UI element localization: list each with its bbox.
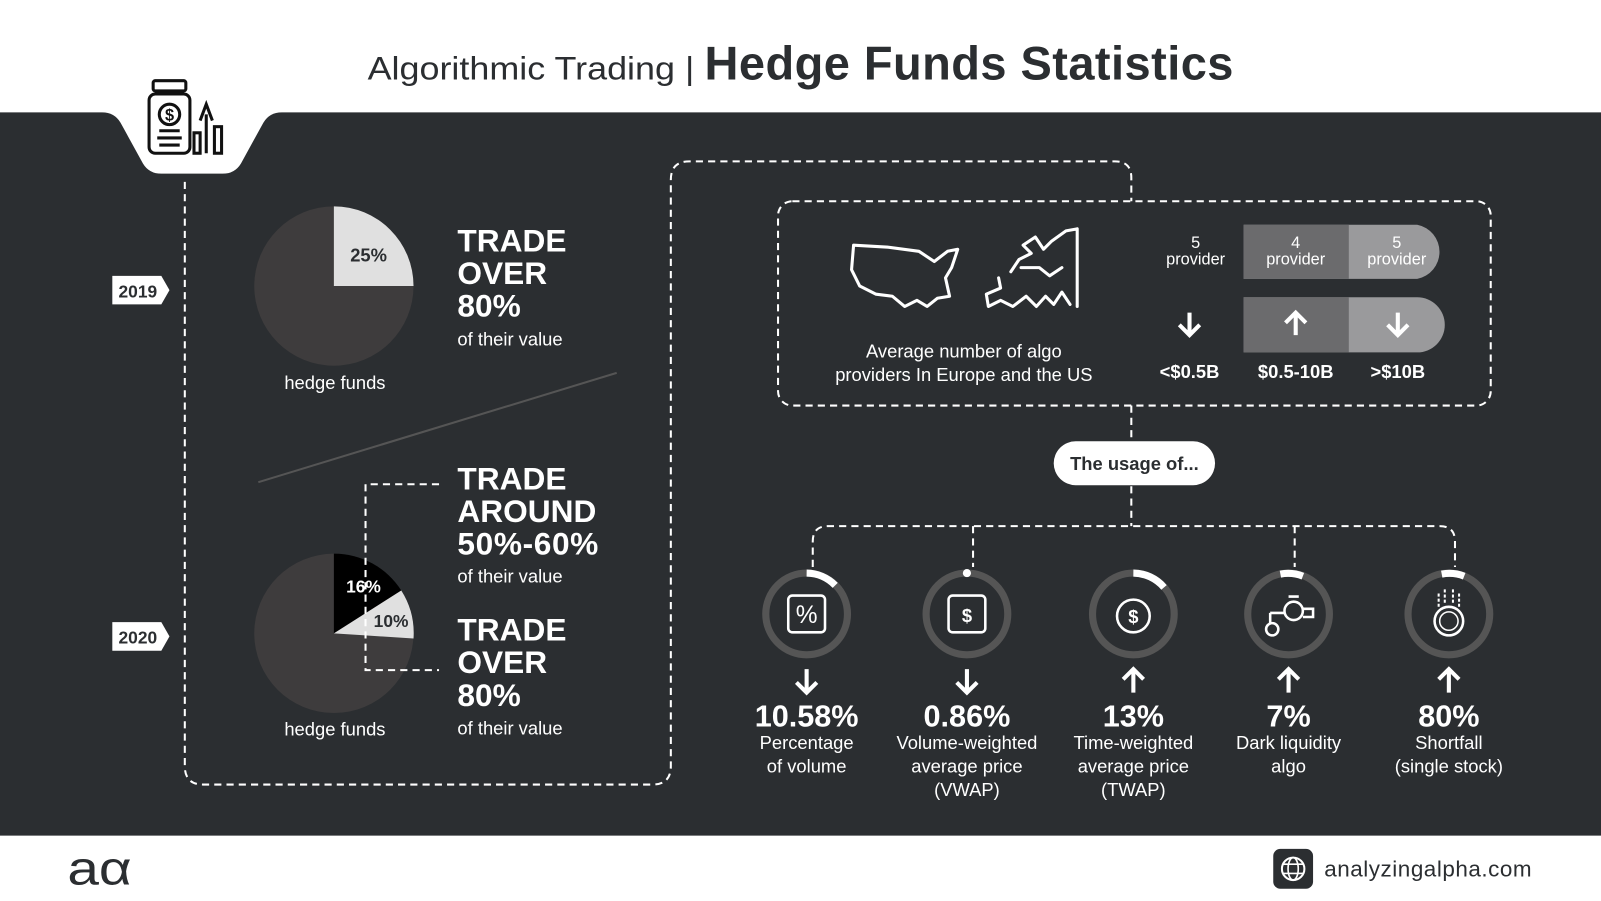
usage item 4: algo bbox=[1271, 755, 1306, 776]
usage item 2: $ bbox=[962, 605, 972, 626]
pie chart 2020: hedge funds bbox=[284, 719, 385, 740]
usage item 1: 10.58% bbox=[755, 699, 859, 733]
text: trade over 80% 2020: TRADE bbox=[457, 611, 566, 648]
title: Hedge Funds Statistics bbox=[705, 37, 1233, 90]
panel: algo providers: <$0.5B bbox=[1160, 361, 1219, 382]
text: trade around 50-60%: AROUND bbox=[457, 493, 596, 529]
usage connectors bbox=[813, 406, 1455, 567]
pie chart 2020: 16% bbox=[346, 576, 381, 596]
text: trade around 50-60%: of their value bbox=[457, 565, 563, 586]
usage item 1 bbox=[755, 573, 859, 776]
text: trade around 50-60%: 50%-60% bbox=[457, 526, 598, 562]
panel: algo providers: 5 bbox=[1191, 234, 1200, 252]
panel: algo providers: >$10B bbox=[1370, 361, 1425, 382]
usage item 5: (single stock) bbox=[1395, 755, 1503, 776]
pie chart 2019 bbox=[254, 206, 414, 393]
footer website bbox=[1273, 849, 1532, 889]
text: trade over 80% 2019 bbox=[457, 222, 566, 349]
usage item 2: average price bbox=[911, 755, 1023, 776]
usage item 5: Shortfall bbox=[1415, 732, 1483, 753]
usage item 3: 13% bbox=[1103, 699, 1164, 733]
usage item 5 bbox=[1395, 573, 1503, 776]
text: trade around 50-60%: TRADE bbox=[457, 460, 566, 496]
icon: Europe map bbox=[986, 229, 1077, 306]
text: trade over 80% 2020: OVER bbox=[457, 644, 547, 680]
pill: the usage of bbox=[1054, 441, 1215, 485]
year tag 2020: 2020 bbox=[119, 628, 157, 648]
text: trade around 50-60% bbox=[457, 460, 598, 586]
usage item 2 bbox=[896, 569, 1037, 800]
footer logo: aα bbox=[67, 842, 132, 895]
usage item 2: (VWAP) bbox=[934, 779, 1000, 800]
usage item 1: of volume bbox=[767, 755, 846, 776]
panel: algo providers: provider bbox=[1266, 251, 1326, 269]
panel: algo providers: 5 bbox=[1392, 234, 1401, 252]
footer website: analyzingalpha.com bbox=[1324, 856, 1532, 881]
pie chart 2019: 25% bbox=[350, 245, 387, 266]
icon: money jar: $ bbox=[165, 107, 174, 125]
text: trade over 80% 2019: TRADE bbox=[457, 222, 566, 258]
usage item 3 bbox=[1073, 573, 1193, 800]
year tag 2019 bbox=[112, 276, 169, 304]
usage item 3: Time-weighted bbox=[1073, 732, 1193, 753]
text: trade over 80% 2019: 80% bbox=[457, 288, 521, 324]
panel: algo providers: Average number of algo bbox=[866, 341, 1062, 362]
usage item 1: % bbox=[796, 602, 818, 629]
pie chart 2020: 10% bbox=[374, 611, 408, 631]
text: trade over 80% 2019: OVER bbox=[457, 255, 547, 291]
usage item 4: 7% bbox=[1266, 699, 1311, 733]
icon: money jar bbox=[149, 81, 222, 153]
usage item 3: (TWAP) bbox=[1101, 779, 1166, 800]
usage item 2: Volume-weighted bbox=[896, 732, 1037, 753]
text: trade over 80% 2020 bbox=[457, 611, 566, 738]
panel: algo providers: provider bbox=[1166, 251, 1226, 269]
pill: the usage of: The usage of... bbox=[1070, 453, 1199, 474]
usage item 3: $ bbox=[1128, 606, 1138, 627]
pie chart 2020 bbox=[254, 554, 414, 740]
usage item 2: 0.86% bbox=[924, 699, 1010, 733]
usage item 1: Percentage bbox=[760, 732, 854, 753]
pie chart 2019: hedge funds bbox=[284, 372, 385, 393]
panel: algo providers: providers In Europe and the US bbox=[835, 364, 1093, 385]
dashed connector frame bbox=[185, 161, 1131, 785]
panel: algo providers: $0.5-10B bbox=[1258, 361, 1333, 382]
panel: algo providers: 4 bbox=[1291, 234, 1300, 252]
year tag 2020 bbox=[112, 622, 169, 651]
usage item 4 bbox=[1236, 573, 1342, 776]
provider bars bbox=[1244, 225, 1439, 279]
icon: US map bbox=[852, 245, 958, 306]
panel: algo providers bbox=[778, 201, 1491, 406]
year tag 2019: 2019 bbox=[119, 281, 157, 301]
text: trade over 80% 2019: of their value bbox=[457, 328, 563, 349]
panel: algo providers: provider bbox=[1367, 251, 1427, 269]
text: trade over 80% 2020: of their value bbox=[457, 717, 563, 738]
title bbox=[368, 37, 1233, 90]
usage item 4: Dark liquidity bbox=[1236, 732, 1342, 753]
usage item 3: average price bbox=[1078, 755, 1189, 776]
text: trade over 80% 2020: 80% bbox=[457, 677, 521, 713]
title: Algorithmic Trading | bbox=[368, 50, 694, 87]
usage item 5: 80% bbox=[1418, 699, 1480, 733]
